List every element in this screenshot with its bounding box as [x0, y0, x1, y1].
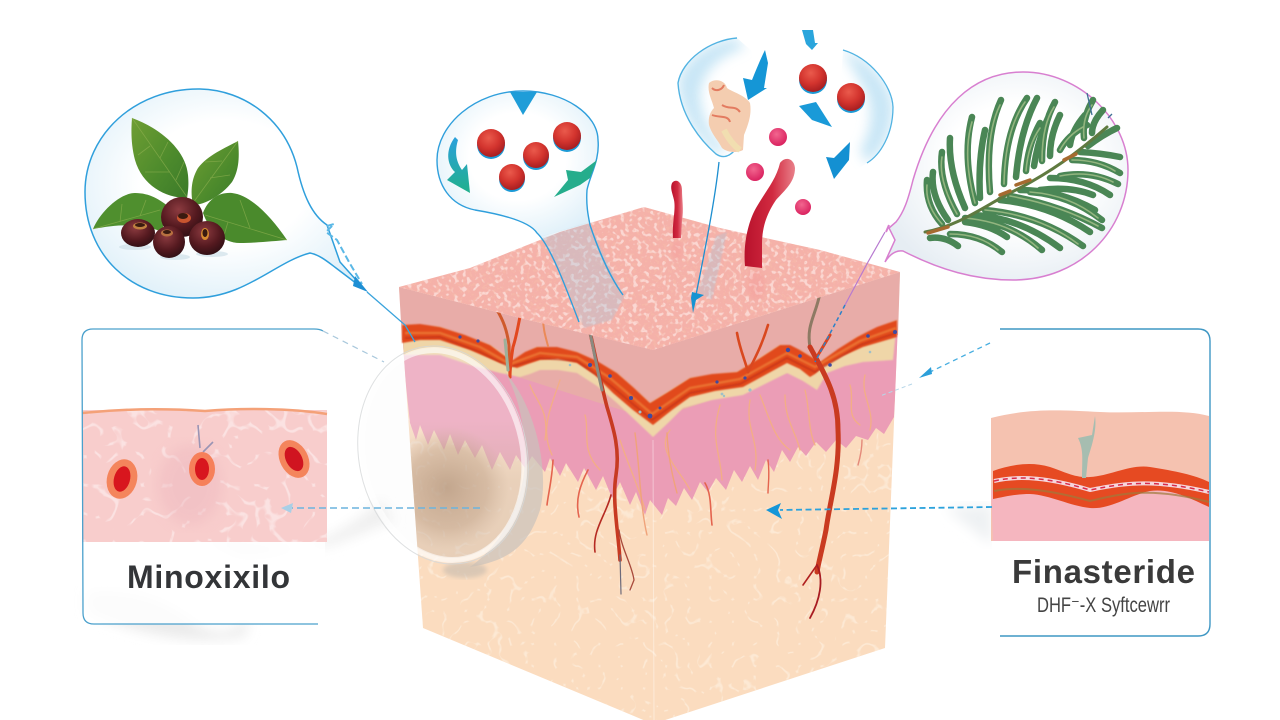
follicle left: [102, 456, 142, 502]
dermis fat layer (cream): [390, 270, 910, 720]
follicle right: [272, 435, 316, 483]
label: Finasteride: Finasteride: [1012, 553, 1195, 590]
dashed connector from rosemary bubble: [815, 225, 889, 362]
blue arrow small top: [802, 30, 818, 50]
red vascular band: [402, 320, 897, 425]
pink molecules: [746, 128, 811, 215]
red hair shafts: [671, 159, 795, 300]
skin section with wavy band: [991, 410, 1209, 541]
large shaft: [745, 159, 795, 268]
top surface of the skin: [395, 200, 905, 355]
dashed arrow to left card: [281, 503, 480, 513]
dermis capillaries: [530, 375, 871, 510]
dashed arrow from right card top: [880, 343, 990, 396]
band streaks and cells: [405, 328, 896, 420]
card: Finasteride band panel: [991, 329, 1210, 636]
arrow to skin surface: [691, 162, 719, 313]
card border: [1000, 329, 1210, 636]
dashed arrow from berry bubble to skin: [367, 292, 415, 342]
hair roots and vessels: [497, 293, 862, 618]
bubble: berries and leaves: [85, 89, 368, 298]
bubble: rosemary sprig: [885, 72, 1128, 280]
small needle tips: [1087, 93, 1112, 118]
flow arrow left: [447, 137, 470, 193]
magnifying lens: [357, 346, 543, 580]
skin section with follicles: [82, 409, 327, 542]
bubble: broken capsule with tissue and molecules: [678, 30, 893, 313]
flow arrow top: [510, 92, 537, 115]
dashed arrow from right card to skin: [766, 503, 992, 519]
label: system subtitle: DHF⁻-X Syftcewrr: [1037, 594, 1170, 617]
blue arrow right: [826, 142, 850, 179]
pink dermis layer: [400, 320, 900, 515]
bubble: red molecules: [437, 91, 624, 328]
band blue cells: [458, 330, 897, 418]
small shaft: [671, 181, 683, 238]
sprig stem: [925, 127, 1107, 232]
block centre seam: [653, 440, 654, 720]
epidermis side faces: [399, 272, 900, 420]
blue arrow middle: [799, 102, 832, 127]
flow arrow right: [554, 160, 597, 197]
beige basal band: [402, 320, 897, 437]
skin cross-section block: [390, 200, 910, 720]
tail arrowhead: [353, 276, 368, 292]
card: Minoxidil follicle panel: [82, 329, 327, 624]
red molecules: [477, 122, 581, 192]
card border: [82, 329, 323, 624]
red molecules: [799, 64, 865, 113]
dark red berries: [119, 197, 228, 260]
label: Minoxixilo: Minoxixilo: [127, 559, 290, 595]
green leaves: [93, 118, 287, 243]
follicle centre: [189, 452, 215, 486]
tissue fragment: [709, 80, 751, 152]
sprig needles: [927, 98, 1120, 252]
faint beam to skin: [698, 232, 727, 300]
blue arrow large: [743, 50, 768, 100]
faint shadow blobs behind cards: [88, 500, 992, 640]
dashed connector from left card top: [323, 331, 384, 362]
